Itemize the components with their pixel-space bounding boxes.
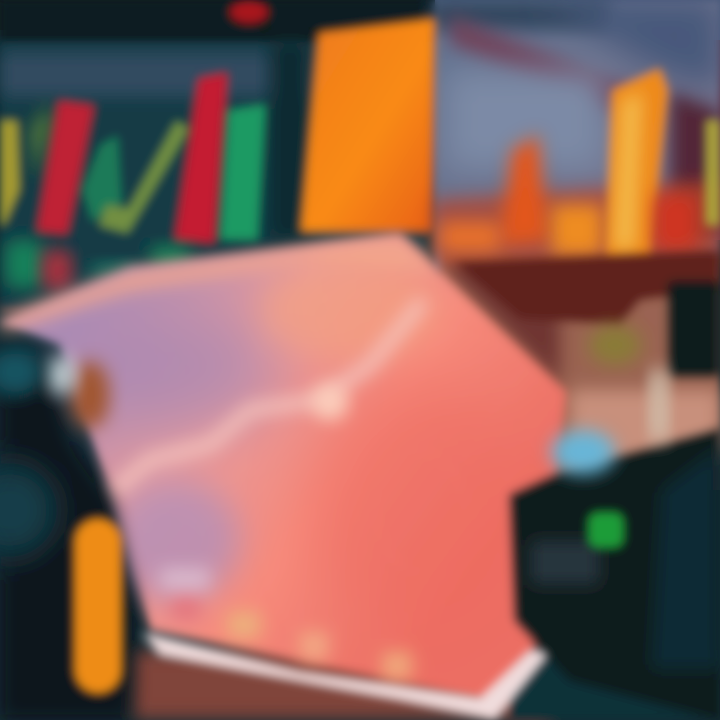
paper shading [60, 310, 280, 430]
panel: top-left dark chart wall [0, 0, 440, 310]
bar chart: orange block [300, 18, 435, 232]
icon: orange bottle [74, 518, 122, 694]
icon: right device with green light [510, 282, 720, 720]
panel: warm wall behind the table [440, 255, 720, 490]
panel: document with rising line [0, 234, 566, 700]
paper top edge highlight [0, 238, 440, 332]
panel: lower backdrop [130, 650, 720, 720]
panel: dark red table area [455, 250, 720, 365]
device upper right [668, 282, 720, 377]
panel: white page bottom edge [142, 632, 550, 720]
paper sheet [0, 234, 566, 700]
panel: top-right blue-grey wall [430, 0, 720, 270]
bar chart: right orange bars [432, 68, 720, 262]
icon: left person silhouette [0, 345, 135, 720]
chart: left candlesticks and check line [0, 72, 266, 290]
icon: red light at top [229, 0, 269, 24]
small bars at the bottom of the page [160, 568, 412, 680]
rising line [115, 305, 420, 490]
